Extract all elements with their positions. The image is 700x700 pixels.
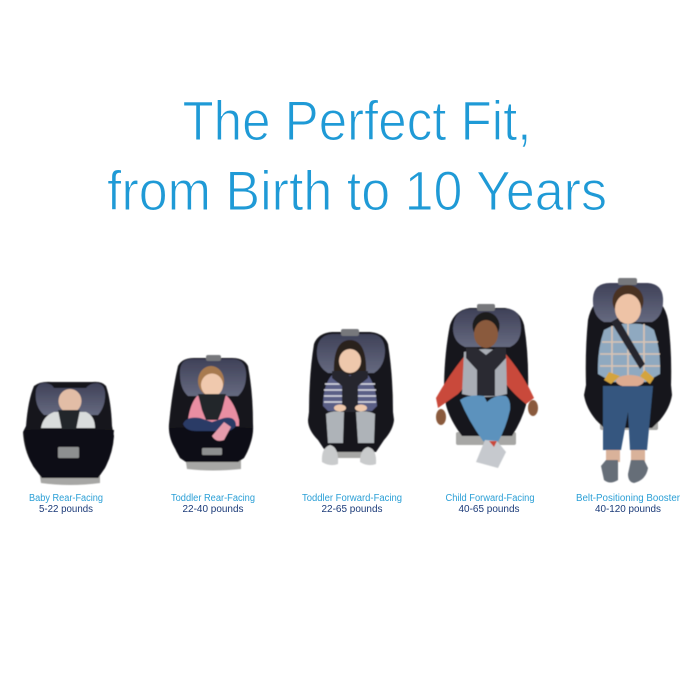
icon: vest and harness: [462, 349, 507, 397]
label: toddler rear-facing: Toddler Rear-Facing: [171, 493, 255, 504]
label: child forward-facing: Child Forward-Facing: [446, 493, 534, 504]
label: toddler forward-facing: [302, 493, 402, 515]
icon: seat shell: [308, 332, 394, 452]
icon: headrest: [453, 309, 521, 347]
icon: boy hands: [436, 409, 446, 425]
label: belt-positioning booster: Belt-Positioning Booster: [576, 493, 681, 504]
icon: baby head: [58, 389, 82, 413]
label: toddler rear-facing: 22-40 pounds: [182, 504, 244, 515]
icon: boy jeans: [460, 396, 510, 444]
icon: seat base: [336, 446, 368, 458]
label: child forward-facing: 40-65 pounds: [458, 504, 520, 515]
icon: girl shoes: [322, 445, 376, 465]
panel: child forward-facing seat: [436, 304, 538, 468]
icon: toddler legs: [183, 418, 236, 431]
label: belt-positioning booster: [576, 493, 681, 515]
icon: headrest: [180, 359, 246, 396]
icon: boy hair and head: [612, 285, 644, 317]
panel: toddler forward-facing seat: [308, 329, 394, 465]
label: child forward-facing: [446, 493, 534, 515]
icon: plaid shirt: [598, 324, 660, 382]
icon: girl head and hair: [334, 340, 366, 378]
icon: harness: [332, 371, 368, 412]
icon: seat base: [456, 432, 516, 445]
title: The Perfect Fit,: [182, 89, 532, 152]
icon: seat belt: [611, 318, 645, 369]
icon: seat base: [600, 418, 658, 430]
icon: boy socks and shoes: [606, 450, 645, 462]
label: toddler forward-facing: Toddler Forward-Facing: [302, 493, 402, 504]
icon: seat front: [24, 429, 114, 478]
label: toddler rear-facing: [171, 493, 255, 515]
icon: seat base: [185, 456, 241, 470]
icon: toddler pink top: [188, 396, 239, 426]
icon: boy shoe: [476, 440, 506, 468]
icon: boy head: [472, 312, 500, 340]
icon: girl legs: [326, 411, 375, 443]
icon: seat shell: [169, 358, 253, 462]
icon: striped top: [323, 375, 377, 411]
icon: headrest: [593, 283, 663, 322]
icon: headrest: [317, 334, 385, 373]
icon: seat shell: [444, 308, 528, 436]
title: from Birth to 10 Years: [107, 159, 607, 222]
icon: headrest: [36, 383, 105, 415]
panel: baby rear-facing seat: [23, 382, 114, 485]
panel: belt-positioning booster seat: [584, 278, 672, 483]
label: baby rear-facing: Baby Rear-Facing: [29, 493, 103, 504]
icon: seat shell: [584, 298, 672, 428]
icon: yellow cuffs and hands: [604, 370, 654, 384]
icon: hands: [334, 404, 346, 412]
icon: belt buckle label: [58, 447, 79, 458]
icon: toddler head and hair: [198, 366, 224, 396]
label: baby rear-facing: 5-22 pounds: [39, 504, 93, 515]
icon: belt label: [202, 448, 222, 455]
label: belt-positioning booster: 40-120 pounds: [595, 504, 661, 515]
icon: seat front: [169, 427, 253, 462]
icon: baby body: [41, 412, 95, 428]
icon: seat shell: [23, 382, 114, 478]
label: toddler forward-facing: 22-65 pounds: [322, 504, 382, 515]
label: baby rear-facing: [29, 493, 103, 515]
icon: jeans: [603, 386, 653, 450]
icon: seat base: [39, 470, 100, 485]
title: [107, 89, 607, 222]
icon: toddler shoe: [212, 422, 231, 441]
panel: toddler rear-facing seat: [169, 355, 253, 470]
icon: red sleeves: [436, 352, 534, 408]
